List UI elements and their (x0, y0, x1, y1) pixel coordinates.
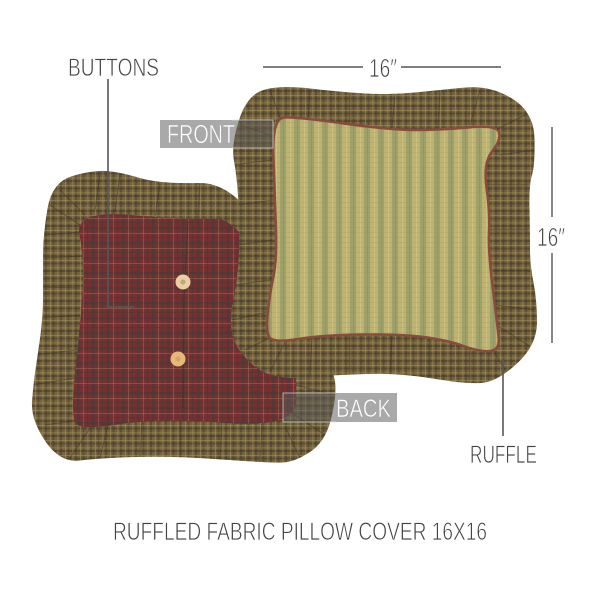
width dimension: 16″ (369, 53, 397, 83)
placket seam (183, 221, 188, 408)
back plaid panel (73, 214, 296, 427)
icon: upper button (176, 274, 190, 290)
back ruffle (32, 171, 336, 463)
label: buttons: BUTTONS (68, 54, 159, 82)
leader: ruffle (502, 360, 504, 436)
front plaid panel with piping (267, 117, 499, 351)
leader: buttons (108, 79, 134, 307)
label: back: BACK (336, 395, 391, 423)
title: RUFFLED FABRIC PILLOW COVER 16X16 (113, 518, 487, 546)
front ruffle (231, 87, 537, 383)
icon: lower button (170, 352, 186, 366)
front pillow (231, 87, 537, 383)
back pillow (32, 171, 336, 463)
label: ruffle: RUFFLE (470, 441, 537, 469)
label: front: FRONT (167, 119, 235, 149)
height dimension: 16″ (537, 222, 565, 252)
label: back (283, 393, 397, 423)
